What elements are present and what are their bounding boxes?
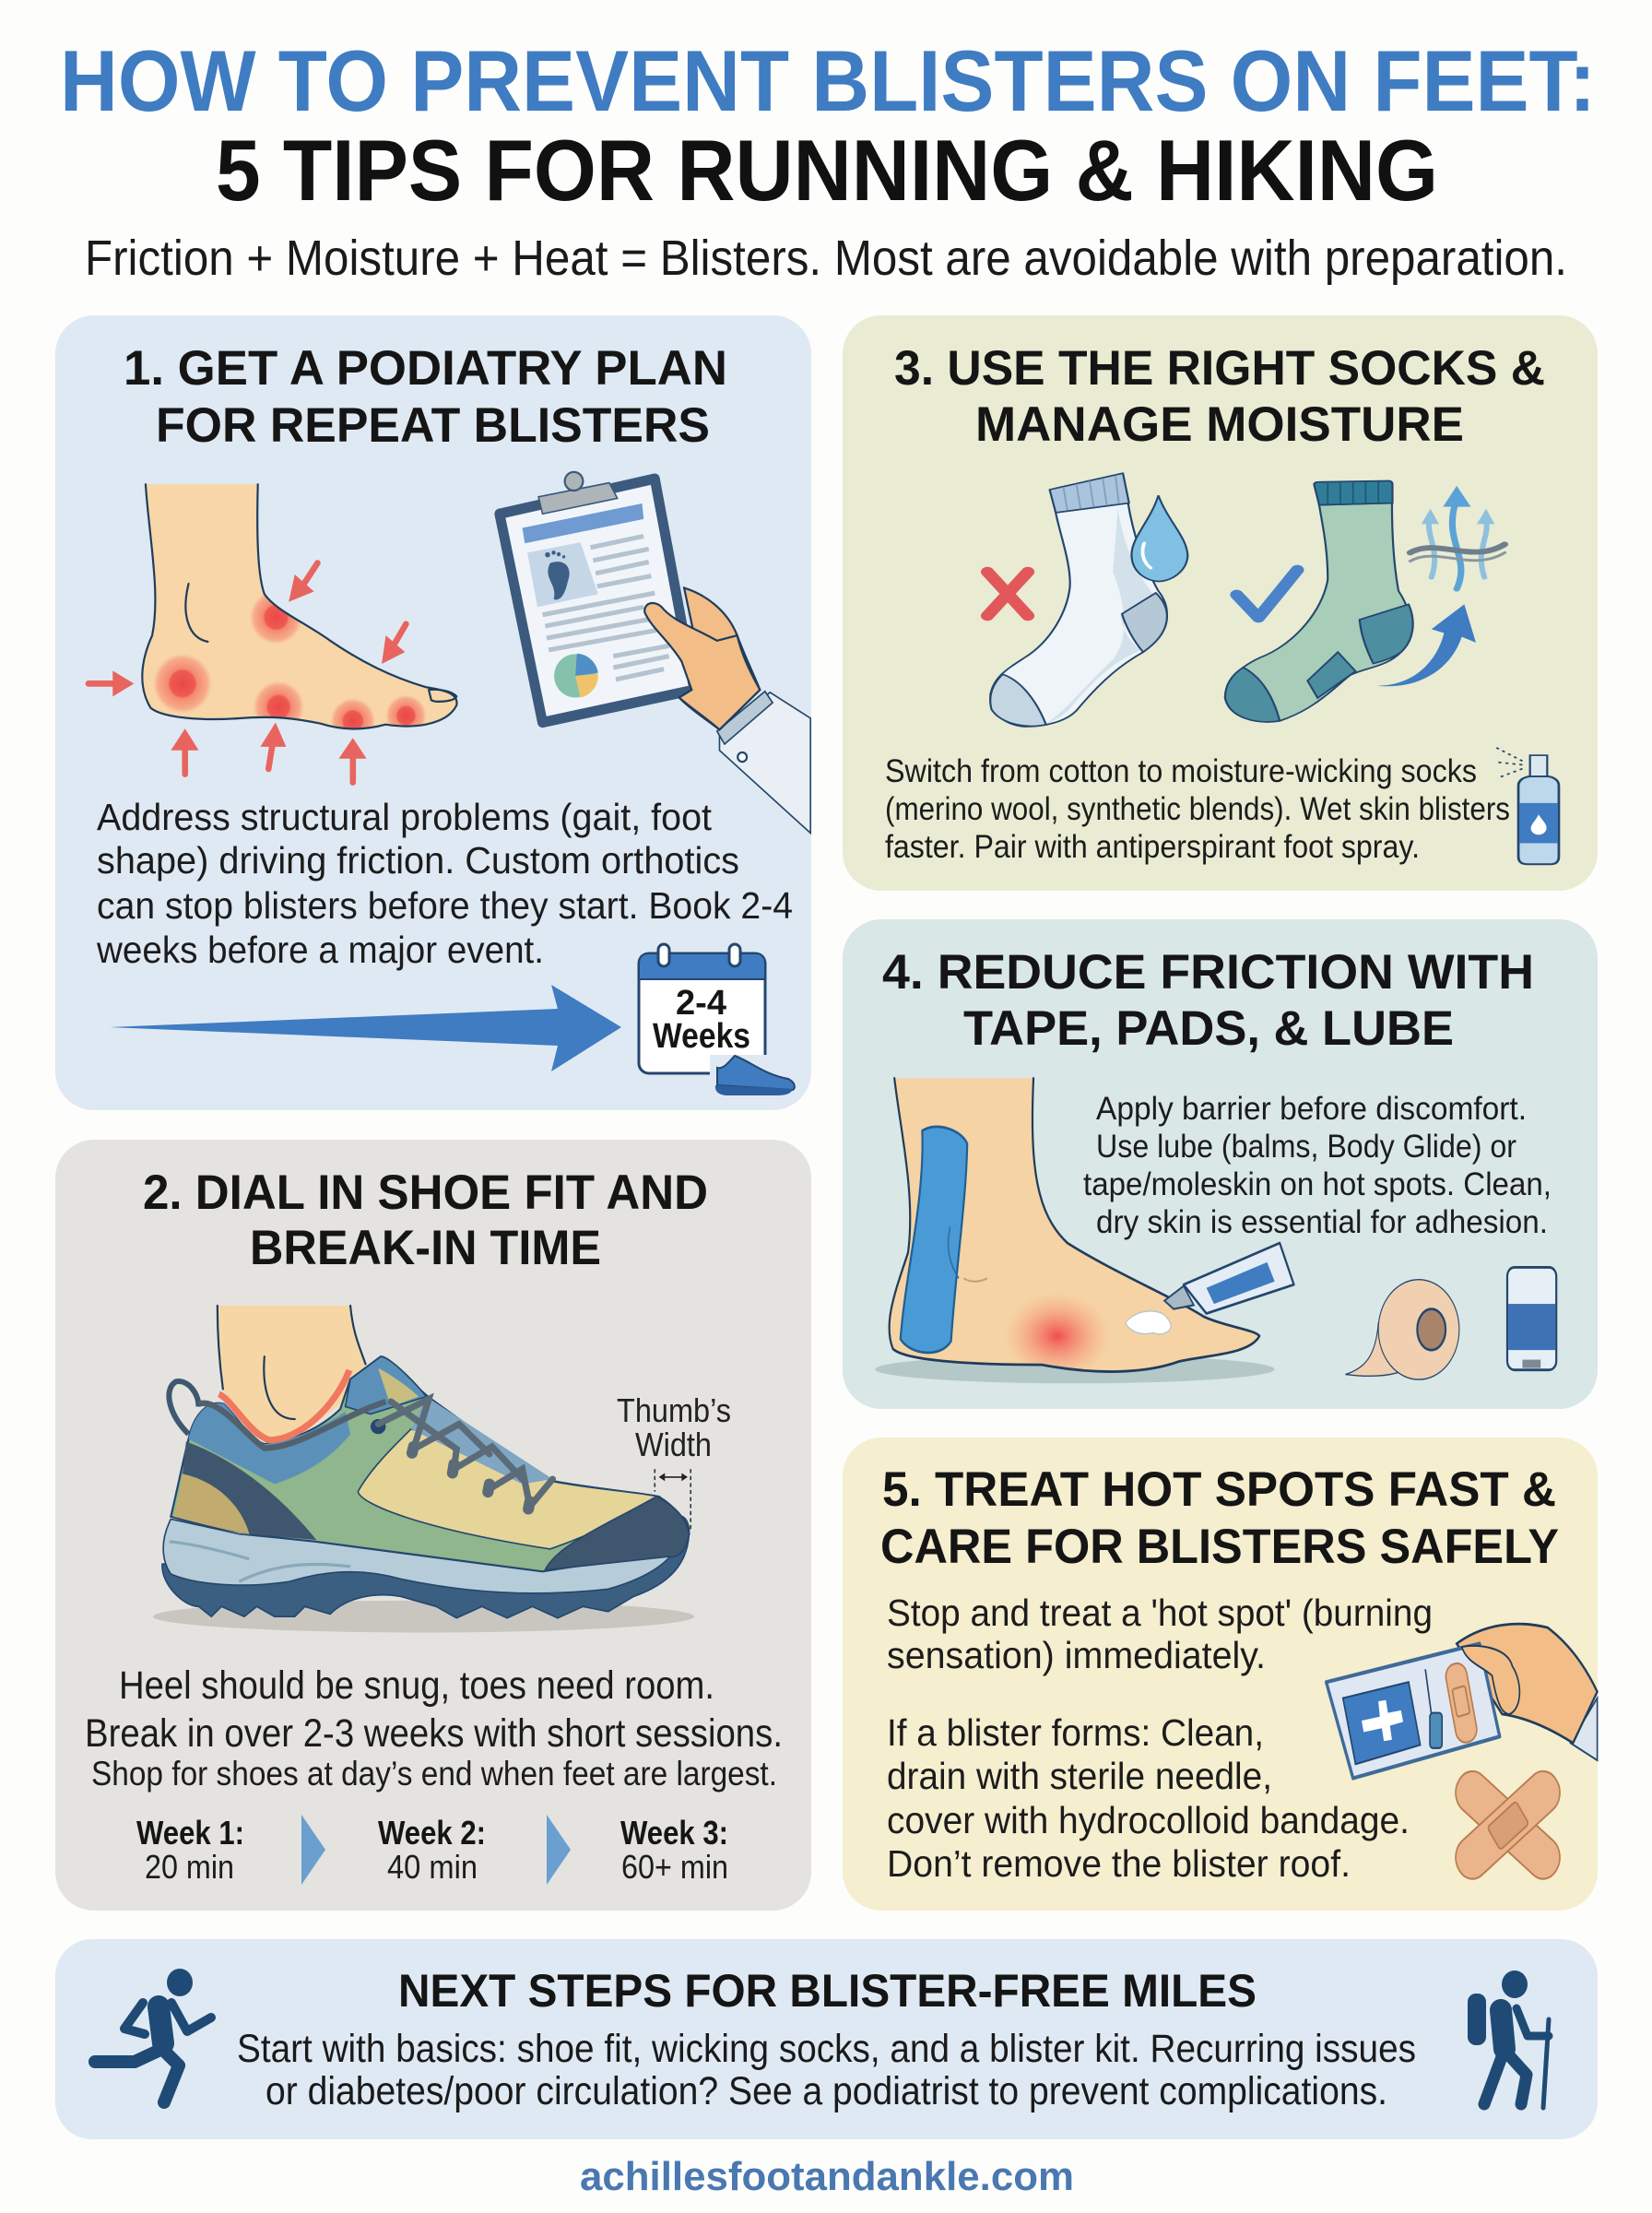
panel: tip 1 podiatry plan [55,315,811,1110]
icon: blister kit held by a hand [1327,1624,1598,1779]
icon: runner [95,1969,211,2102]
text: tip 4 body: dry skin is essential for adhesion. [1096,1204,1548,1240]
text: hot spot advice: Stop and treat a 'hot spot' (burning [887,1592,1433,1634]
heading: next steps: NEXT STEPS FOR BLISTER-FREE MILES [398,1965,1257,2017]
label: thumb's width: Thumb’s [617,1391,731,1429]
illustration: foot with blister spots and arrows [88,484,457,783]
schedule: week 2: Week 2: [378,1814,486,1852]
text: next steps body: Start with basics: shoe fit, wicking socks, and a blister kit. Recurring issues [237,2027,1416,2071]
icon: hiker [1468,1970,1549,2108]
heading: tip 4 [882,945,1534,1056]
title: 5 TIPS FOR RUNNING & HIKING [216,122,1438,219]
text: tip 4 body: tape/moleskin on hot spots. Clean, [1083,1166,1552,1202]
heading: tip 2: 2. DIAL IN SHOE FIT AND [143,1166,708,1220]
heading: tip 4: TAPE, PADS, & LUBE [963,1001,1454,1056]
icon: antiperspirant spray bottle [1494,747,1559,864]
schedule: week 2 [378,1814,486,1886]
text: tip 1 body: can stop blisters before they start. Book 2-4 [97,884,793,927]
text: hot spot advice: sensation) immediately. [887,1634,1266,1676]
illustration: cotton sock marked wrong [987,473,1187,727]
heading: tip 1 [124,341,727,453]
schedule: week 2: 40 min [387,1848,478,1886]
heading: tip 1: FOR REPEAT BLISTERS [156,398,710,453]
text: tip 2 body: Heel should be snug, toes need room. [119,1663,714,1708]
text: tip 3 body [885,753,1510,865]
label: thumb's width: Width [635,1426,712,1463]
text: tip 3 body: (merino wool, synthetic blends). Wet skin blisters [885,791,1510,827]
heading: tip 4: 4. REDUCE FRICTION WITH [882,945,1534,1000]
heading: tip 2: BREAK-IN TIME [250,1221,601,1275]
schedule: week 1 [136,1814,244,1886]
text: tip 4 body [1083,1091,1552,1240]
text: tip 3 body: faster. Pair with antiperspirant foot spray. [885,829,1420,865]
schedule: week 3 [620,1814,728,1886]
icon: tape roll [1345,1280,1459,1379]
icon: crossed bandages [1449,1763,1566,1887]
schedule: week 1: Week 1: [136,1814,244,1852]
text: blister care advice [887,1711,1410,1885]
panel: next steps [55,1939,1598,2139]
heading: tip 2 [143,1166,708,1275]
panel: tip 4 tape, pads and lube [843,919,1598,1409]
label: thumb's width [617,1391,731,1463]
footer: website: achillesfootandankle.com [580,2154,1074,2199]
icon: lube tube [1164,1243,1294,1313]
text: tip 1 body: shape) driving friction. Custom orthotics [97,839,739,882]
schedule: week 1: 20 min [145,1848,234,1886]
illustration: clipboard held by a hand [500,472,810,834]
text: tip 4 body: Apply barrier before discomfort. [1096,1091,1527,1127]
text: tip 2 body: Shop for shoes at day’s end when feet are largest. [91,1755,777,1793]
schedule: week 3: Week 3: [620,1814,728,1852]
text: blister care advice: drain with sterile needle, [887,1755,1272,1797]
heading: tip 3 [894,341,1545,452]
arrow: lead time to event [110,985,621,1071]
text: tip 1 body: Address structural problems (gait, foot [97,796,713,838]
illustration: wicking sock marked right [1225,480,1413,722]
illustration: hiking shoe on a foot [153,1306,694,1632]
text: tip 4 body: Use lube (balms, Body Glide) or [1096,1129,1516,1165]
icon: calendar 2-4 weeks with shoe: 2-4 [676,984,726,1023]
heading: tip 5 [880,1462,1559,1574]
heading: tip 5: CARE FOR BLISTERS SAFELY [880,1520,1559,1574]
icon: calendar 2-4 weeks with shoe [639,944,797,1095]
schedule: week 3: 60+ min [621,1848,728,1886]
text: next steps body [237,2027,1416,2113]
title [60,32,1596,219]
text: tip 3 body: Switch from cotton to moisture-wicking socks [885,753,1477,789]
panel: tip 3 socks and moisture [843,315,1598,891]
heading: tip 3: MANAGE MOISTURE [975,397,1464,452]
text: tip 1 body: weeks before a major event. [96,929,544,971]
heading: tip 5: 5. TREAT HOT SPOTS FAST & [882,1462,1556,1517]
text: tip 2 body: Break in over 2-3 weeks with short sessions. [85,1711,783,1756]
text: blister care advice: If a blister forms: Clean, [887,1711,1264,1754]
icon: calendar 2-4 weeks with shoe: Weeks [653,1017,750,1056]
icon: moisture evaporating through fabric [1375,486,1504,686]
text: hot spot advice [887,1592,1433,1676]
text: tip 2 body [85,1663,783,1793]
text: blister care advice: cover with hydrocolloid bandage. [887,1799,1410,1841]
text: next steps body: or diabetes/poor circulation? See a podiatrist to prevent complications. [266,2069,1387,2113]
text: blister care advice: Don’t remove the blister roof. [887,1842,1351,1885]
panel: tip 5 hot spots and blister care [843,1438,1598,1911]
heading: tip 3: 3. USE THE RIGHT SOCKS & [894,341,1545,396]
arrow: week 2 to week 3 [547,1815,571,1885]
arrow: week 1 to week 2 [301,1815,325,1885]
text: tip 1 body [96,796,793,971]
illustration: foot with tape and lube applied [875,1078,1275,1383]
panel: tip 2 shoe fit [55,1140,811,1911]
icon: anti-friction balm stick [1507,1267,1556,1370]
heading: tip 1: 1. GET A PODIATRY PLAN [124,341,727,396]
